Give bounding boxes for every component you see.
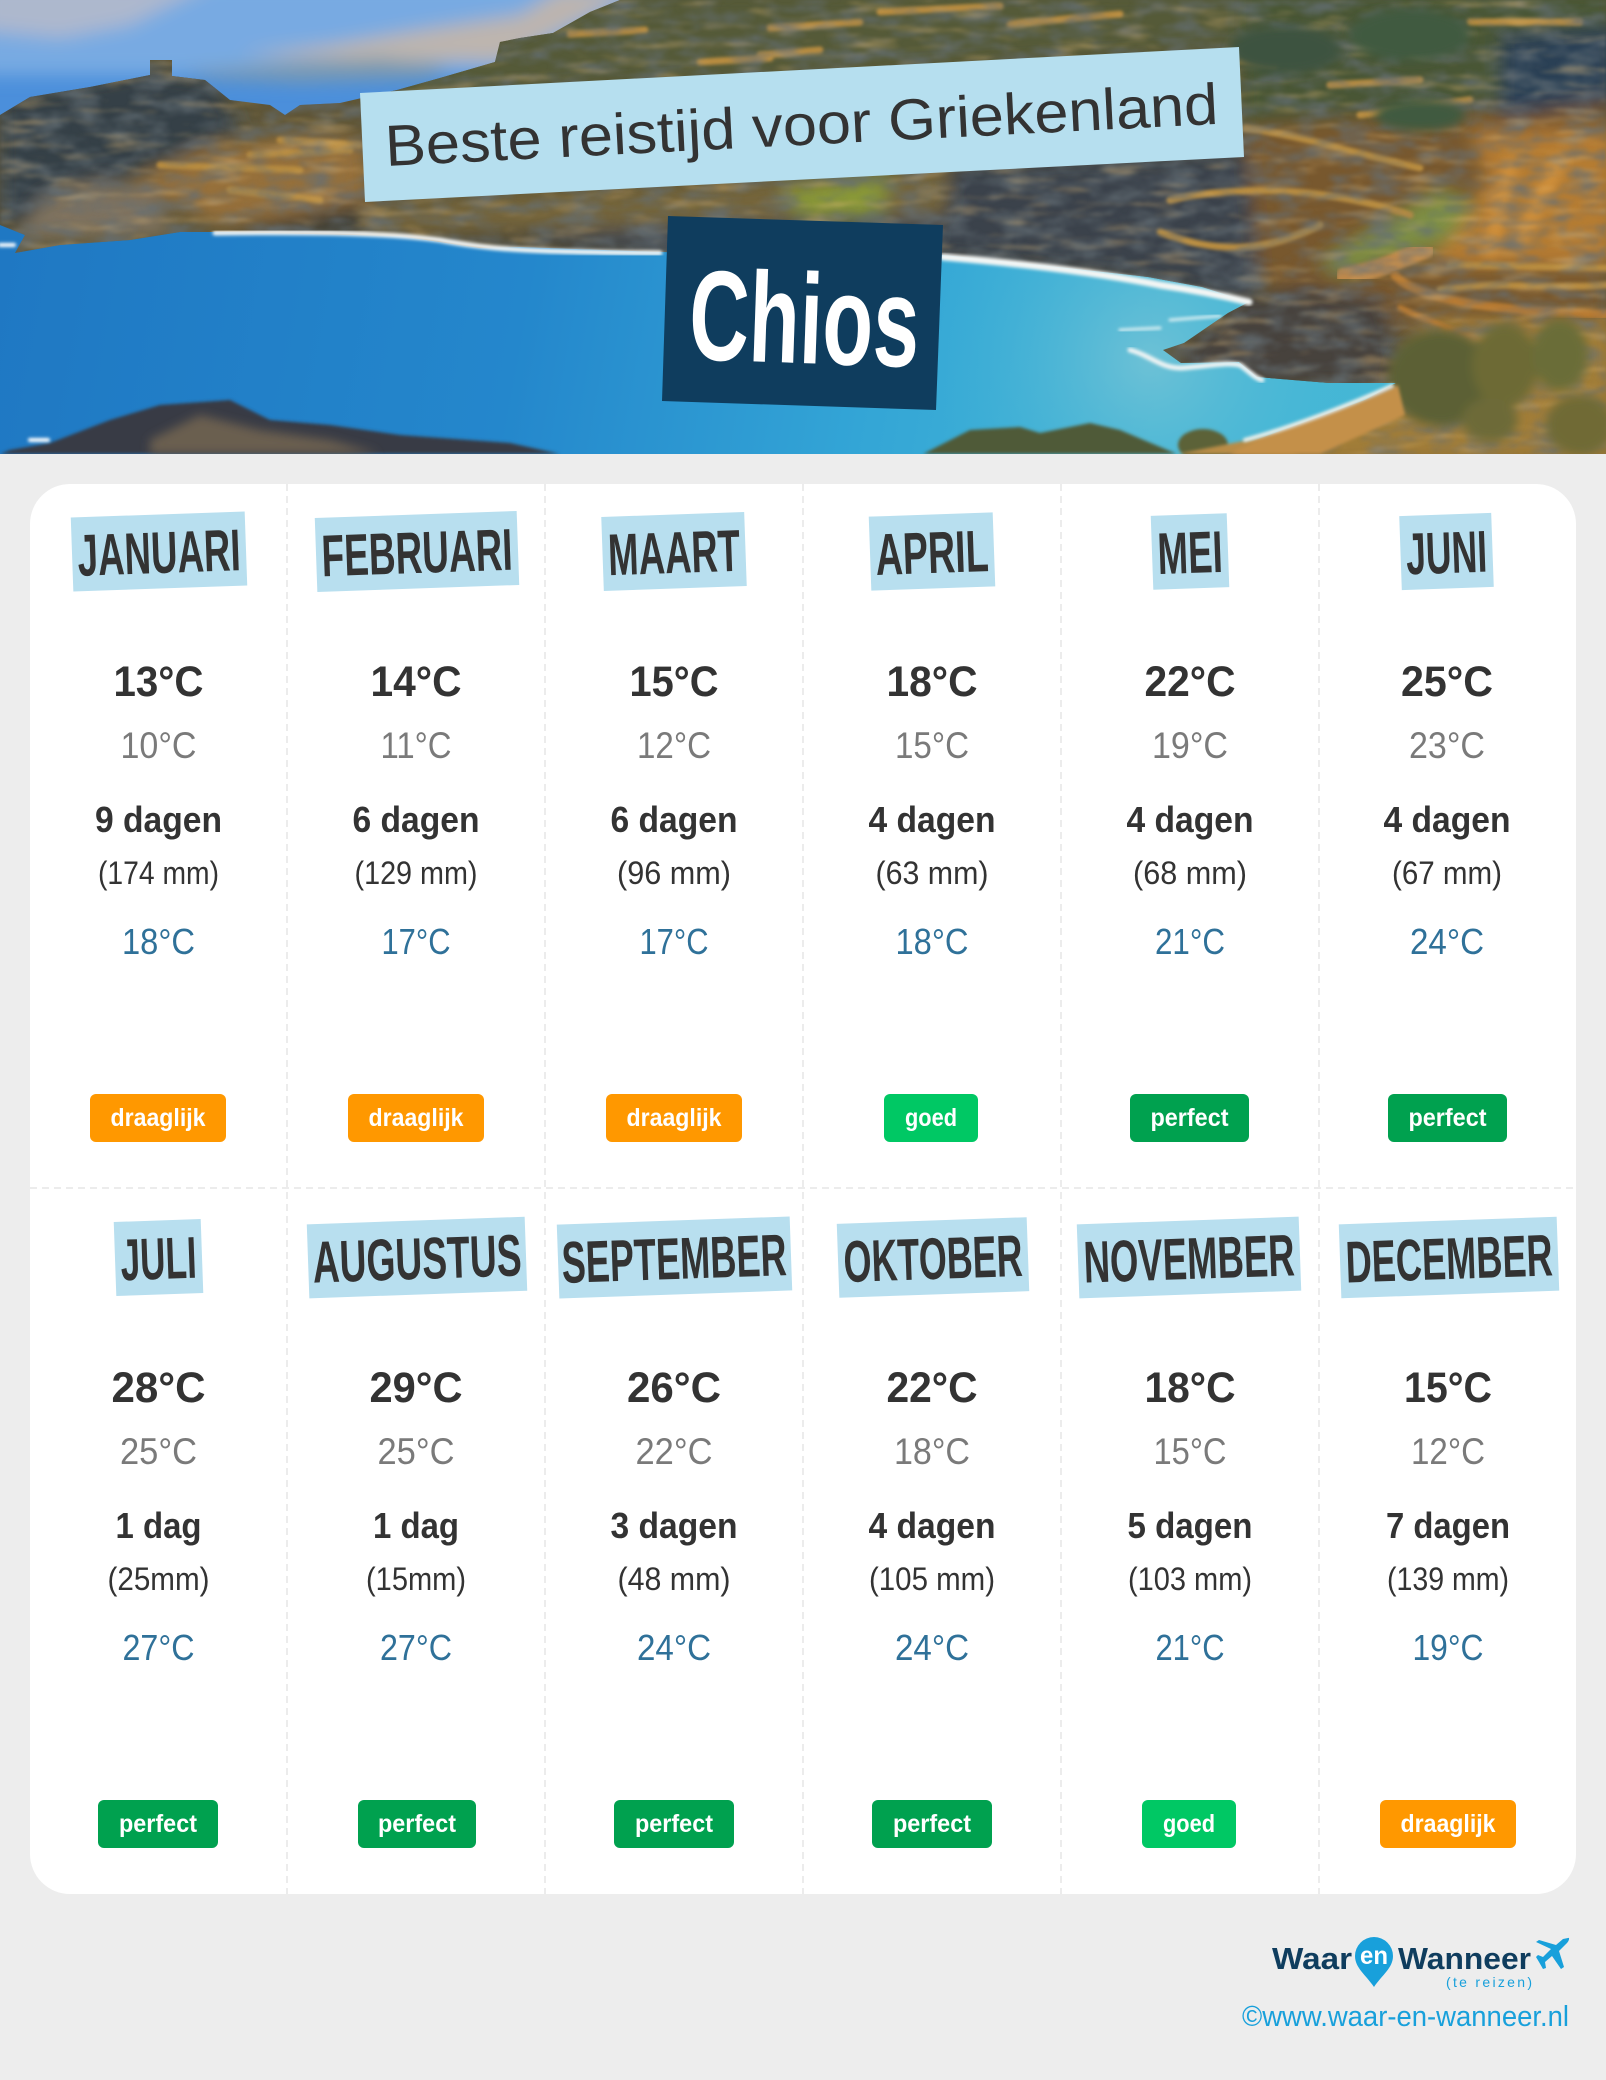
website credit: ©www.waar-en-wanneer.nl: [1242, 2001, 1569, 2033]
terraces and dirt track: [160, 6, 1606, 355]
max temperature: 25°C: [1401, 658, 1493, 706]
rain days: 3 dagen: [610, 1505, 738, 1546]
month heading: JUNI: [1405, 519, 1488, 587]
min temperature: 19°C: [1152, 725, 1228, 766]
rating badge: [348, 1094, 484, 1142]
rating badge: [606, 1094, 742, 1142]
max temperature: 22°C: [1144, 658, 1236, 706]
rain days: 7 dagen: [1386, 1505, 1510, 1546]
sea temperature: 24°C: [1410, 921, 1484, 962]
sea temperature: 17°C: [382, 921, 450, 962]
month heading: [837, 1217, 1029, 1298]
column: april: [868, 512, 996, 1142]
rain days: 4 dagen: [1384, 799, 1510, 840]
min temperature: 25°C: [120, 1431, 197, 1472]
rating badge: [884, 1094, 978, 1142]
sea temperature: 18°C: [122, 921, 195, 962]
rain days: 6 dagen: [610, 799, 738, 840]
column: juni: [1384, 513, 1510, 1142]
max temperature: 15°C: [1404, 1364, 1492, 1412]
rating badge: [614, 1800, 734, 1848]
rating badge: perfect: [1150, 1104, 1229, 1132]
rainfall: (103 mm): [1128, 1561, 1252, 1597]
rating badge: [872, 1800, 992, 1848]
min temperature: 23°C: [1409, 725, 1485, 766]
rating badge: [358, 1800, 476, 1848]
rating badge: [1142, 1800, 1236, 1848]
min temperature: 10°C: [120, 725, 196, 766]
month heading: [601, 512, 747, 591]
max temperature: 28°C: [112, 1364, 206, 1412]
column: mei: [1126, 513, 1254, 1142]
column: maart: [601, 512, 747, 1142]
month heading: JANUARI: [76, 517, 242, 589]
rain days: 6 dagen: [352, 799, 480, 840]
rating badge: draaglijk: [626, 1104, 722, 1132]
rain days: 4 dagen: [868, 1505, 996, 1546]
rating badge: perfect: [1408, 1104, 1487, 1132]
rating badge: draaglijk: [368, 1104, 464, 1132]
month heading: [1151, 513, 1229, 590]
rain days: 4 dagen: [868, 799, 996, 840]
min temperature: 12°C: [1411, 1431, 1485, 1472]
rainfall: (15mm): [366, 1561, 466, 1597]
rating badge: perfect: [378, 1810, 457, 1838]
rain days: 5 dagen: [1128, 1505, 1252, 1546]
month heading: [1077, 1217, 1301, 1298]
icon: map pin: [1355, 1937, 1393, 1987]
max temperature: 22°C: [886, 1364, 978, 1412]
column: november: [1077, 1217, 1301, 1848]
sea temperature: 18°C: [896, 921, 968, 962]
rainfall: (174 mm): [98, 855, 219, 891]
rating badge: draaglijk: [1400, 1810, 1496, 1838]
month heading: [557, 1216, 792, 1299]
month heading: [1399, 513, 1494, 590]
title banner: Beste reistijd voor Griekenland: [383, 72, 1220, 179]
month heading: JULI: [119, 1225, 198, 1293]
rainfall: (68 mm): [1133, 855, 1247, 891]
rating badge: perfect: [635, 1810, 714, 1838]
rainfall: (63 mm): [876, 855, 988, 891]
rating badge: goed: [1163, 1810, 1215, 1838]
rain days: 1 dag: [373, 1505, 459, 1546]
month heading: SEPTEMBER: [560, 1222, 788, 1296]
header photo: Chios bay: [0, 0, 1606, 464]
sea temperature: 24°C: [637, 1627, 711, 1668]
icon: airplane: [1536, 1938, 1569, 1969]
month heading: [315, 511, 519, 592]
column: januari: [71, 511, 247, 1142]
hills and headland: [0, 0, 1606, 464]
beach and surf: [0, 233, 1405, 454]
rating badge: draaglijk: [110, 1104, 206, 1132]
rainfall: (139 mm): [1387, 1561, 1509, 1597]
title banner: [360, 47, 1244, 202]
sea: [0, 225, 1396, 454]
rainfall: (96 mm): [617, 855, 731, 891]
rating badge: goed: [905, 1104, 957, 1132]
column: juli: [98, 1219, 218, 1848]
min temperature: 25°C: [378, 1431, 454, 1472]
rain days: 1 dag: [116, 1505, 202, 1546]
month heading: MAART: [607, 518, 741, 588]
month heading: MEI: [1156, 519, 1224, 587]
min temperature: 15°C: [895, 725, 969, 766]
min temperature: 11°C: [380, 725, 452, 766]
logo: Waar en Wanneer: Waar: [1272, 1941, 1352, 1976]
max temperature: 29°C: [370, 1364, 462, 1412]
rating badge: perfect: [893, 1810, 972, 1838]
max temperature: 18°C: [886, 658, 978, 706]
month heading: NOVEMBER: [1082, 1222, 1296, 1296]
min temperature: 15°C: [1154, 1431, 1226, 1472]
sea temperature: 27°C: [380, 1627, 452, 1668]
month heading: APRIL: [874, 518, 990, 588]
column: februari: [315, 511, 519, 1142]
sea temperature: 21°C: [1156, 1627, 1224, 1668]
max temperature: 26°C: [627, 1364, 721, 1412]
rain days: 9 dagen: [95, 799, 222, 840]
sea temperature: 21°C: [1155, 921, 1225, 962]
month heading: AUGUSTUS: [311, 1222, 523, 1296]
trees: [1230, 9, 1606, 455]
month heading: [71, 511, 247, 592]
max temperature: 14°C: [370, 658, 462, 706]
min temperature: 18°C: [894, 1431, 970, 1472]
sea temperature: 24°C: [895, 1627, 969, 1668]
logo: Waar en Wanneer: (te reizen): [1446, 1974, 1532, 1990]
rainfall: (48 mm): [618, 1561, 730, 1597]
rainfall: (105 mm): [869, 1561, 995, 1597]
month heading: OKTOBER: [842, 1223, 1024, 1295]
rainfall: (67 mm): [1392, 855, 1502, 891]
sea temperature: 27°C: [122, 1627, 194, 1668]
column: augustus: [307, 1217, 527, 1848]
rating badge: [1380, 1800, 1516, 1848]
icon: map pin: en: [1360, 1942, 1388, 1970]
logo: Waar en Wanneer: Wanneer: [1398, 1941, 1531, 1976]
month heading: [114, 1219, 203, 1296]
sky and distant mountains: [0, 0, 620, 115]
rating badge: perfect: [119, 1810, 198, 1838]
sea temperature: 17°C: [640, 921, 708, 962]
panel: climate table: [30, 484, 1576, 1894]
rating badge: [1388, 1094, 1507, 1142]
month heading: [869, 512, 995, 591]
foreground rocks and shrubs: [0, 400, 1300, 461]
max temperature: 13°C: [114, 658, 204, 706]
month heading: FEBRUARI: [320, 517, 514, 589]
rating badge: [90, 1094, 226, 1142]
column: september: [557, 1216, 792, 1848]
island name: Chios: Chios: [687, 244, 922, 395]
rain days: 4 dagen: [1126, 799, 1254, 840]
month heading: [307, 1217, 527, 1298]
max temperature: 18°C: [1144, 1364, 1236, 1412]
rainfall: (25mm): [108, 1561, 210, 1597]
rating badge: [98, 1800, 218, 1848]
rating badge: [1130, 1094, 1249, 1142]
logo: Waar en Wanneer: [1272, 1937, 1569, 1990]
column: oktober: [837, 1217, 1029, 1848]
land texture: [0, 0, 1606, 454]
max temperature: 15°C: [630, 658, 718, 706]
min temperature: 22°C: [636, 1431, 712, 1472]
rainfall: (129 mm): [354, 855, 478, 891]
island name: Chios: [662, 216, 943, 410]
min temperature: 12°C: [637, 725, 711, 766]
sea temperature: 19°C: [1412, 1627, 1484, 1668]
column: december: [1339, 1217, 1559, 1848]
